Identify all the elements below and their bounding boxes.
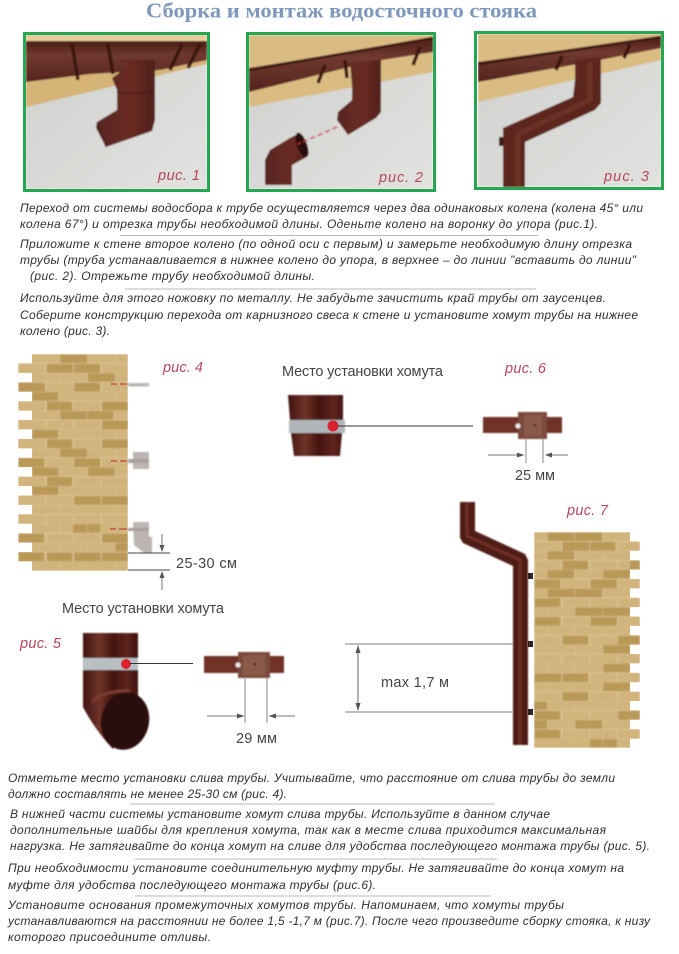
text block: upper instructions: (рис. 2). Отрежьте трубу необходимой длины. [30, 269, 315, 283]
clamp [483, 412, 562, 439]
coupling [288, 395, 345, 456]
frame: photo 3 [476, 32, 662, 188]
panel: photo 3 [476, 32, 662, 188]
text block: lower instructions: устанавливаются на расстоянии не более 1,5 -1,7 м (рис.7). После чего произведите сборку стояка, к низу [7, 914, 651, 928]
frame: photo 2 [248, 34, 434, 190]
text block: lower instructions: дополнительные шайбы для крепления хомута, так как в месте слива приходится максимальная [10, 823, 607, 837]
dimension: 29 мм: 29 мм [236, 731, 277, 747]
panel: photo 1 [24, 34, 208, 190]
drain elbow [83, 633, 155, 754]
text block: lower instructions: должно составлять не менее 25-30 см (рис. 4). [8, 787, 287, 801]
bracket marks [128, 383, 152, 553]
figure 4: brick wall with drain marks [18, 354, 237, 590]
text block: upper instructions [20, 201, 643, 338]
caption: рис. 6: рис. 6 [504, 361, 547, 377]
heading: clamp position: Место установки хомута [282, 364, 444, 380]
dimension: 25-30 см: 25-30 см [176, 556, 237, 572]
dimension: 29 мм [207, 678, 295, 747]
text block: upper instructions: Соберите конструкцию перехода от карнизного свеса к стене и установите хомут трубы на нижнее [20, 308, 638, 322]
figure 5: drain outlet and clamp [19, 601, 295, 754]
text block: lower instructions: В нижней части системы установите хомут слива трубы. Используйте в данном случае [10, 807, 550, 821]
caption: рис. 1: рис. 1 [157, 168, 200, 184]
caption: рис. 5: рис. 5 [19, 636, 62, 652]
text block: lower instructions: нагрузка. Не затягивайте до конца хомут на сливе для удобства последующего монтажа трубы (рис. 5). [10, 839, 650, 853]
brick wall [18, 354, 128, 571]
frame: photo 1 [24, 34, 208, 190]
caption: рис. 7: рис. 7 [566, 503, 609, 519]
text block: lower instructions: Отметьте место установки слива трубы. Учитывайте, что расстояние от слива трубы до земли [8, 771, 615, 785]
text block: lower instructions: Установите основания промежуточных хомутов трубы. Напоминаем, что хомуты трубы [7, 898, 564, 912]
dimension: 25-30 см [128, 534, 237, 590]
figure 6: coupling and clamp [282, 361, 568, 484]
panel: photo 2 [248, 34, 434, 190]
text block: upper instructions: Приложите к стене второе колено (по одной оси с первым) и замерьте необходимую длину отрезка [20, 237, 632, 251]
dimension: max 1,7 м: max 1,7 м [381, 675, 449, 691]
dimension: max 1,7 м [345, 644, 513, 712]
pipe clips [528, 573, 533, 715]
text block: lower instructions: муфте для удобства последующего монтажа трубы (рис.6). [8, 878, 376, 892]
dimension: 25 мм [488, 439, 568, 484]
text block: lower instructions: которого присоедините отливы. [8, 930, 211, 944]
caption: рис. 4: рис. 4 [162, 360, 203, 376]
dimension: 25 мм: 25 мм [515, 468, 555, 484]
text block: upper instructions: колено (рис. 3). [20, 324, 110, 338]
text block: lower instructions [7, 771, 651, 944]
heading: clamp position: Место установки хомута [62, 601, 225, 617]
caption: рис. 2: рис. 2 [378, 170, 423, 186]
text block: upper instructions: Переход от системы водосбора к трубе осуществляется через два одинаковых колена (колена 45° или [20, 201, 643, 215]
text block: upper instructions: трубы (труба устанавливается в нижнее колено до упора, в верхнее – до линии "вставить до линии" [20, 253, 637, 267]
caption: рис. 3: рис. 3 [603, 169, 649, 185]
brick wall [534, 532, 640, 748]
clamp [204, 652, 284, 678]
text block: lower instructions: При необходимости установите соединительную муфту трубы. Не затягивайте до конца хомут на [8, 861, 624, 875]
figure 7: downpipe on wall [345, 502, 640, 748]
text block: upper instructions: колена 67°) и отрезка трубы необходимой длины. Оденьте колено на воронку до упора (рис.1). [20, 217, 598, 231]
downpipe [460, 502, 528, 745]
text block: upper instructions: Используйте для этого ножовку по металлу. Не забудьте зачистить край трубы от заусенцев. [20, 291, 606, 305]
